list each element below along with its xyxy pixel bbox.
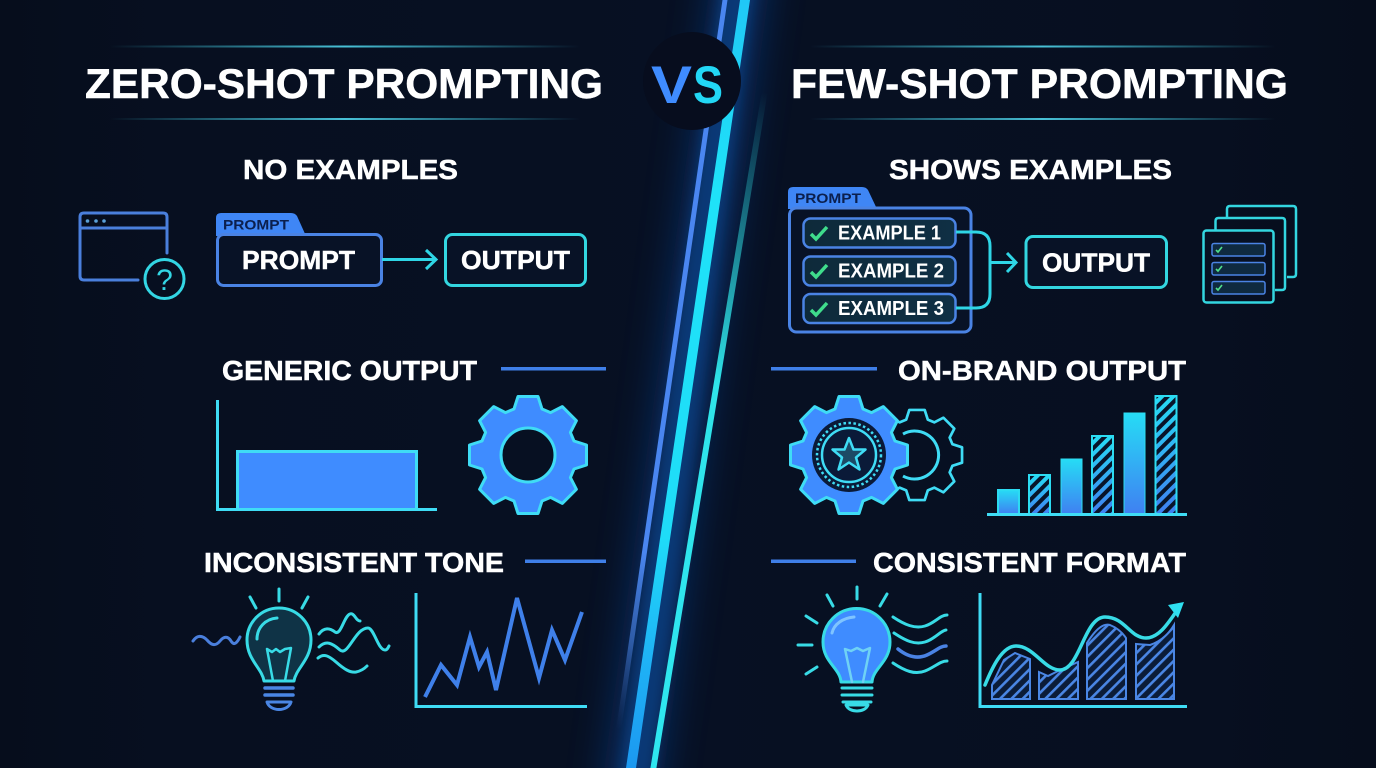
example 3: EXAMPLE 3	[838, 298, 944, 320]
example 2: EXAMPLE 2	[838, 260, 944, 282]
subheading: on-brand output: ON-BRAND OUTPUT	[898, 355, 1186, 386]
prompt box with tab: PROMPT	[242, 245, 355, 275]
output box	[1026, 236, 1166, 288]
VS badge: V	[651, 56, 692, 115]
prompt folder with examples	[788, 187, 971, 332]
subheading: no examples: NO EXAMPLES	[243, 154, 458, 185]
subheading: on-brand output	[771, 355, 1186, 386]
heading: few-shot prompting: FEW-SHOT PROMPTING	[791, 60, 1288, 107]
icon: lightbulb with erratic waves	[193, 589, 389, 710]
example 3	[804, 294, 956, 323]
output box: OUTPUT	[461, 245, 570, 275]
example 1	[804, 218, 956, 248]
arrow	[382, 250, 436, 269]
icon: plain gear	[470, 396, 586, 514]
prompt box with tab	[216, 213, 382, 286]
example 1: EXAMPLE 1	[838, 222, 941, 244]
subheading: consistent format: CONSISTENT FORMAT	[873, 547, 1186, 578]
prompt box with tab: PROMPT	[223, 216, 289, 232]
subheading: shows examples: SHOWS EXAMPLES	[889, 154, 1172, 185]
panel: zero-shot prompting	[80, 46, 606, 710]
icon: browser window with question mark	[80, 213, 184, 298]
output box: OUTPUT	[1042, 248, 1150, 278]
output box	[446, 234, 586, 286]
bracket arrow	[956, 232, 1016, 308]
icon: stacked documents	[1204, 206, 1296, 302]
central diagonal neon divider	[600, 0, 776, 768]
diagram: prompt to output	[216, 213, 586, 286]
chart: flat bar	[218, 400, 437, 510]
chart: rising bars	[987, 396, 1187, 516]
heading: zero-shot prompting: ZERO-SHOT PROMPTING	[85, 60, 603, 107]
chart: growth line over hatched areas	[980, 593, 1187, 706]
chart: erratic line	[416, 593, 587, 706]
example 2	[804, 256, 956, 286]
VS badge	[643, 32, 741, 130]
diagram: prompt with examples to output	[788, 187, 1166, 332]
subheading: generic output: GENERIC OUTPUT	[222, 355, 477, 386]
panel: few-shot prompting	[771, 46, 1296, 711]
icon: gears with star	[790, 396, 962, 514]
prompt folder with examples: PROMPT	[795, 190, 861, 206]
icon: glowing lightbulb with smooth waves	[798, 587, 947, 711]
icon: browser window with question mark: ?	[156, 264, 173, 297]
VS badge: S	[693, 56, 723, 115]
subheading: inconsistent tone: INCONSISTENT TONE	[204, 547, 504, 578]
subheading: generic output	[222, 355, 606, 386]
